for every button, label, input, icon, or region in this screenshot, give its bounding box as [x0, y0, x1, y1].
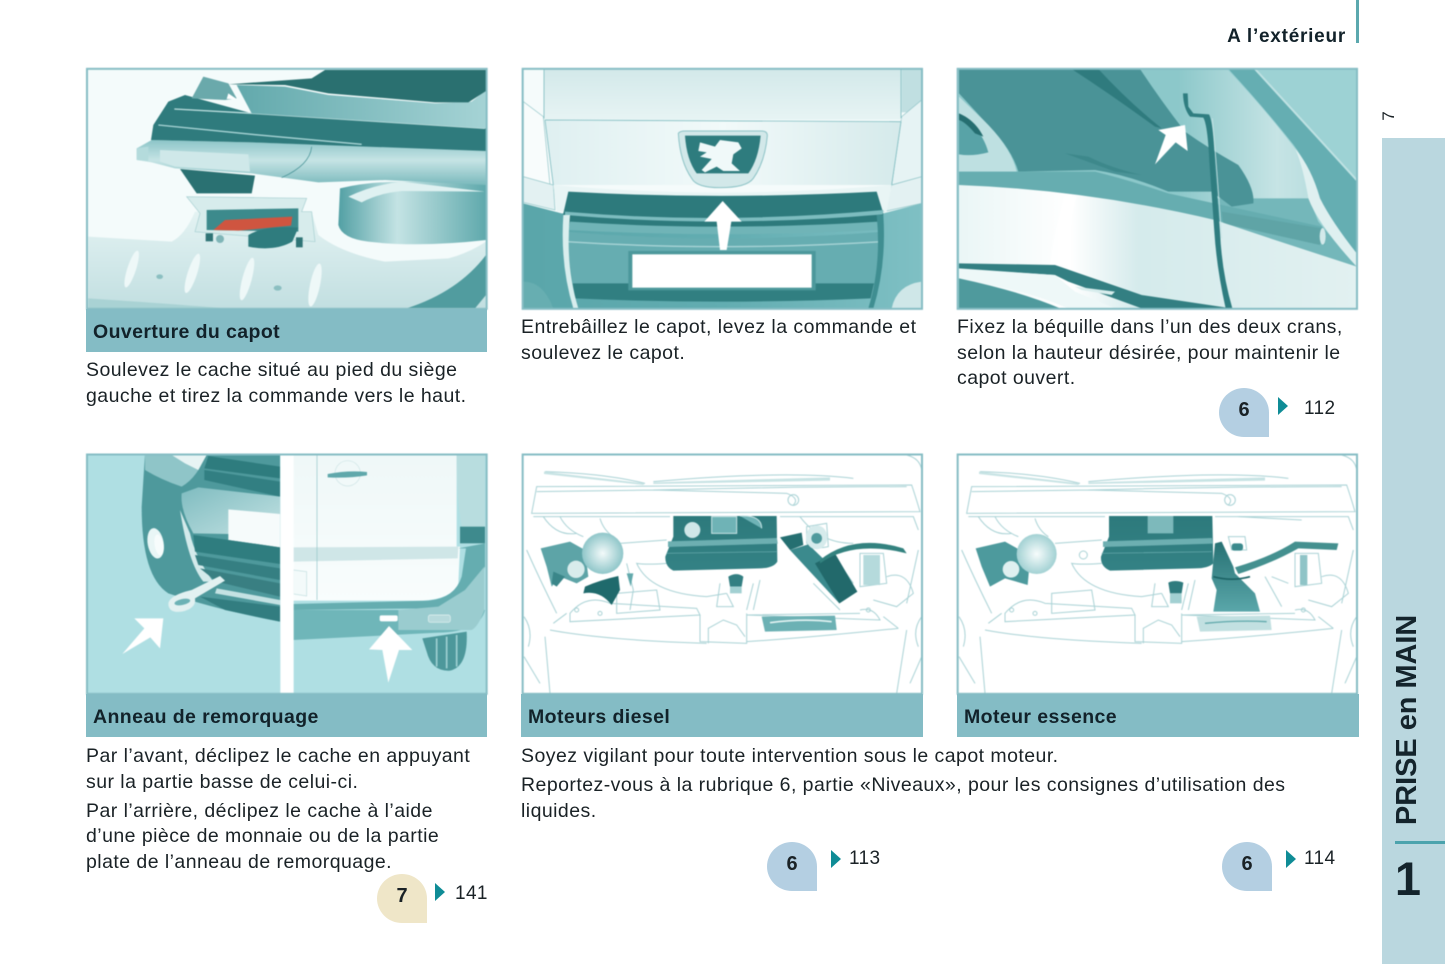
- panel heading: towing ring: [86, 694, 487, 737]
- reference badge: chapter 6 diesel: 6: [786, 853, 798, 875]
- arrow marker: [831, 850, 841, 868]
- page reference 113: 113: [849, 848, 880, 869]
- reference badge: chapter 7: 7: [396, 885, 408, 907]
- reference badge: chapter 7: [377, 874, 427, 923]
- text: raise hood instructions: Entrebâillez le capot, levez la commande et: [521, 316, 916, 338]
- text: towing ring instructions: d’une pièce de monnaie ou de la partie: [86, 825, 439, 847]
- page reference 112: 112: [1304, 398, 1336, 419]
- chapter sidebar: [1382, 138, 1445, 964]
- page number: 7: [1379, 111, 1398, 121]
- text: towing ring instructions: sur la partie basse de celui-ci.: [86, 770, 358, 792]
- reference badge: chapter 6: 6: [1238, 399, 1250, 421]
- text: engine work warning: Soyez vigilant pour toute intervention sous le capot moteur.: [521, 745, 1059, 767]
- arrow marker: [1286, 850, 1296, 868]
- text: hood stay instructions: Fixez la béquille dans l’un des deux crans,: [957, 316, 1343, 338]
- text: hood stay instructions: capot ouvert.: [957, 367, 1076, 389]
- reference badge: chapter 6 diesel: [767, 842, 817, 891]
- panel: petrol engine illustration: [956, 452, 1359, 696]
- panel: hood stay illustration: [956, 67, 1359, 310]
- text: engine work warning: [521, 745, 1286, 822]
- panel: towing ring illustration: [85, 452, 488, 696]
- text: hood opening instructions: [86, 359, 466, 406]
- page reference 114: 114: [1304, 848, 1336, 869]
- panel: van front with logo illustration: [521, 67, 924, 310]
- reference badge: chapter 6 petrol: [1222, 842, 1272, 891]
- text: hood stay instructions: [957, 316, 1343, 389]
- reference badge: chapter 6: [1219, 388, 1269, 437]
- panel heading: diesel engines: Moteurs diesel: [528, 706, 670, 728]
- panel: diesel engine illustration: [521, 452, 924, 696]
- panel heading: petrol engine: Moteur essence: [964, 706, 1117, 728]
- text: towing ring instructions: [86, 745, 470, 872]
- heading accent bar: [1356, 0, 1359, 43]
- chapter number: 1: [1395, 852, 1421, 905]
- chapter title: PRISE en MAIN: [1391, 615, 1423, 825]
- text: hood opening instructions: Soulevez le cache situé au pied du siège: [86, 359, 457, 381]
- panel: seat lever illustration: [85, 67, 488, 310]
- text: engine work warning: Reportez-vous à la rubrique 6, partie «Niveaux», pour les consignes d’utilisation des: [521, 774, 1286, 796]
- panel heading: hood opening: Ouverture du capot: [93, 321, 280, 343]
- text: towing ring instructions: Par l’avant, déclipez le cache en appuyant: [86, 745, 470, 767]
- top right section heading: A l’extérieur: [1227, 26, 1346, 47]
- text: engine work warning: liquides.: [521, 800, 597, 822]
- panel heading: petrol engine: [957, 694, 1359, 737]
- text: towing ring instructions: Par l’arrière, déclipez le cache à l’aide: [86, 800, 433, 822]
- text: hood stay instructions: selon la hauteur désirée, pour maintenir le: [957, 342, 1341, 364]
- page reference 141: 141: [455, 883, 488, 904]
- text: raise hood instructions: soulevez le capot.: [521, 342, 685, 364]
- text: raise hood instructions: [521, 316, 916, 364]
- panel heading: towing ring: Anneau de remorquage: [93, 706, 319, 728]
- arrow marker: [1278, 397, 1288, 415]
- text: towing ring instructions: plate de l’anneau de remorquage.: [86, 850, 392, 872]
- panel heading: hood opening: [86, 309, 487, 352]
- panel heading: diesel engines: [521, 694, 923, 737]
- arrow marker: [435, 883, 445, 901]
- chapter rule: [1395, 841, 1445, 844]
- reference badge: chapter 6 petrol: 6: [1241, 853, 1253, 875]
- text: hood opening instructions: gauche et tirez la commande vers le haut.: [86, 384, 466, 406]
